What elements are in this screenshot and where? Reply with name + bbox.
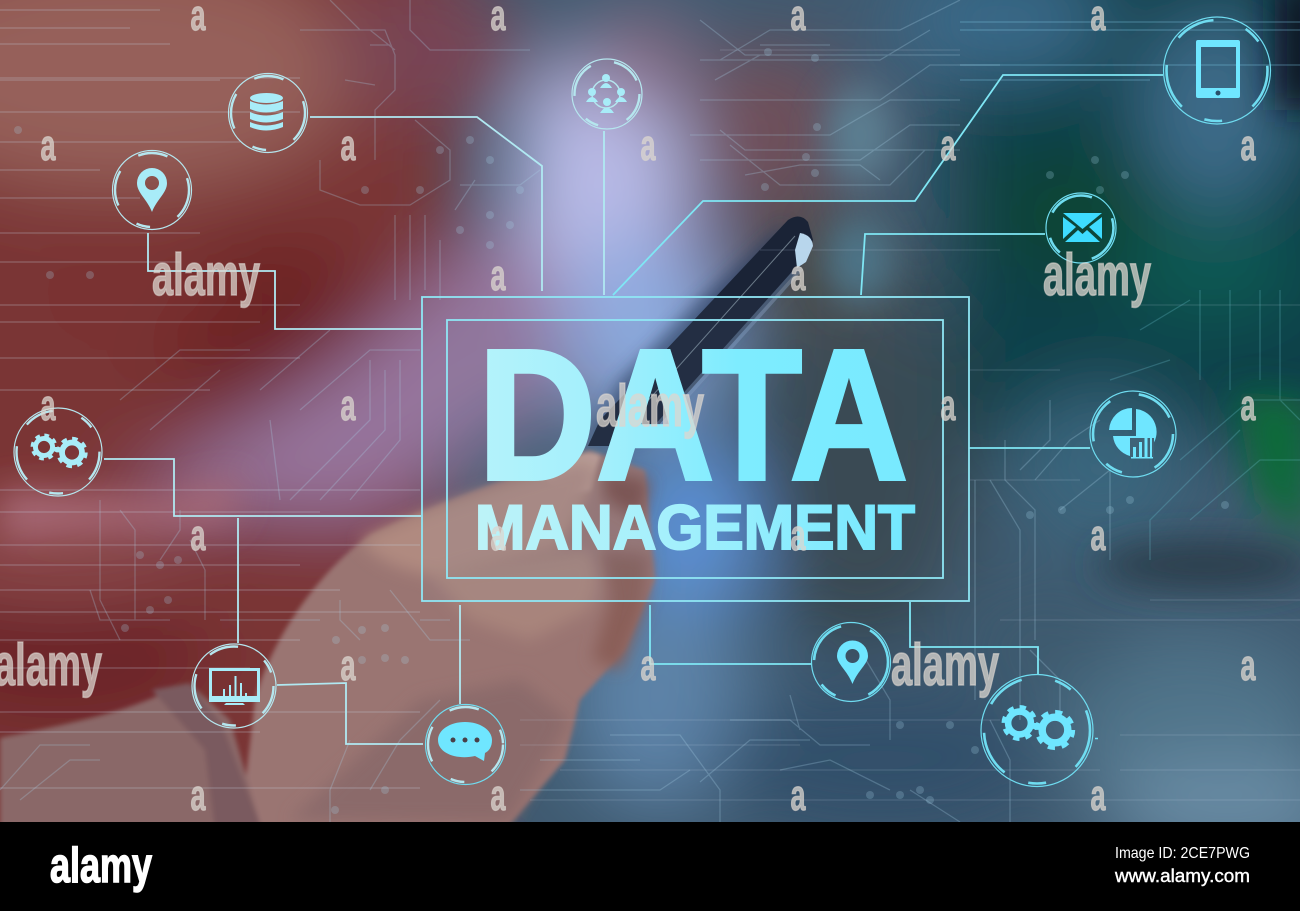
watermark: small repeated marks: a — [1240, 121, 1256, 170]
watermark: small repeated marks: a — [490, 511, 506, 560]
watermark: small repeated marks: a — [340, 121, 356, 170]
icon: speech bubble — [426, 704, 506, 784]
watermark: small repeated marks: a — [1090, 511, 1106, 560]
connector lines — [104, 75, 1163, 744]
watermark: small repeated marks: a — [490, 251, 506, 300]
watermark: small repeated marks: a — [190, 771, 206, 820]
icon: location pin upper left — [112, 150, 192, 230]
watermark: small repeated marks: a — [490, 771, 506, 820]
footer bar — [0, 822, 1300, 911]
watermark: small repeated marks: a — [790, 771, 806, 820]
watermark: alamy top right: alamy — [1043, 242, 1151, 308]
watermark: small repeated marks: a — [790, 251, 806, 300]
central title panel — [422, 297, 969, 601]
watermark: small repeated marks: a — [790, 511, 806, 560]
footer image id and url: Image ID: 2CE7PWG — [1115, 845, 1250, 862]
title: DATA: DATA — [478, 312, 908, 519]
icon: gears left — [14, 408, 102, 496]
watermark: small repeated marks: a — [640, 641, 656, 690]
icon: gears lower right — [981, 674, 1098, 786]
watermark: alamy lower right: alamy — [891, 632, 999, 698]
icon: people network — [572, 59, 642, 129]
phone — [588, 216, 813, 446]
watermark: small repeated marks: a — [40, 381, 56, 430]
icon: envelope — [1046, 193, 1116, 263]
icon: pie chart — [1090, 391, 1176, 477]
watermark: small repeated marks: a — [340, 381, 356, 430]
title: MANAGEMENT: MANAGEMENT — [475, 493, 915, 563]
watermark: small repeated marks: a — [1240, 381, 1256, 430]
watermark: alamy center: alamy — [596, 373, 704, 439]
icon: location pin lower — [812, 622, 890, 702]
footer image id and url: www.alamy.com — [1114, 866, 1250, 886]
hand — [0, 450, 655, 830]
watermark: small repeated marks: a — [190, 511, 206, 560]
icon: monitor chart — [192, 644, 276, 728]
watermark: small repeated marks: a — [640, 121, 656, 170]
watermark: small repeated marks: a — [1090, 771, 1106, 820]
icon: database — [228, 74, 308, 152]
footer image id and url — [1114, 845, 1250, 886]
watermark: small repeated marks: a — [340, 641, 356, 690]
icon: tablet — [1164, 17, 1270, 124]
watermark: small repeated marks: a — [940, 121, 956, 170]
watermark: alamy top left: alamy — [152, 242, 260, 308]
footer logo: alamy — [50, 839, 152, 893]
watermark: small repeated marks: a — [1240, 641, 1256, 690]
watermark: small repeated marks: a — [40, 121, 56, 170]
watermark: small repeated marks: a — [940, 381, 956, 430]
